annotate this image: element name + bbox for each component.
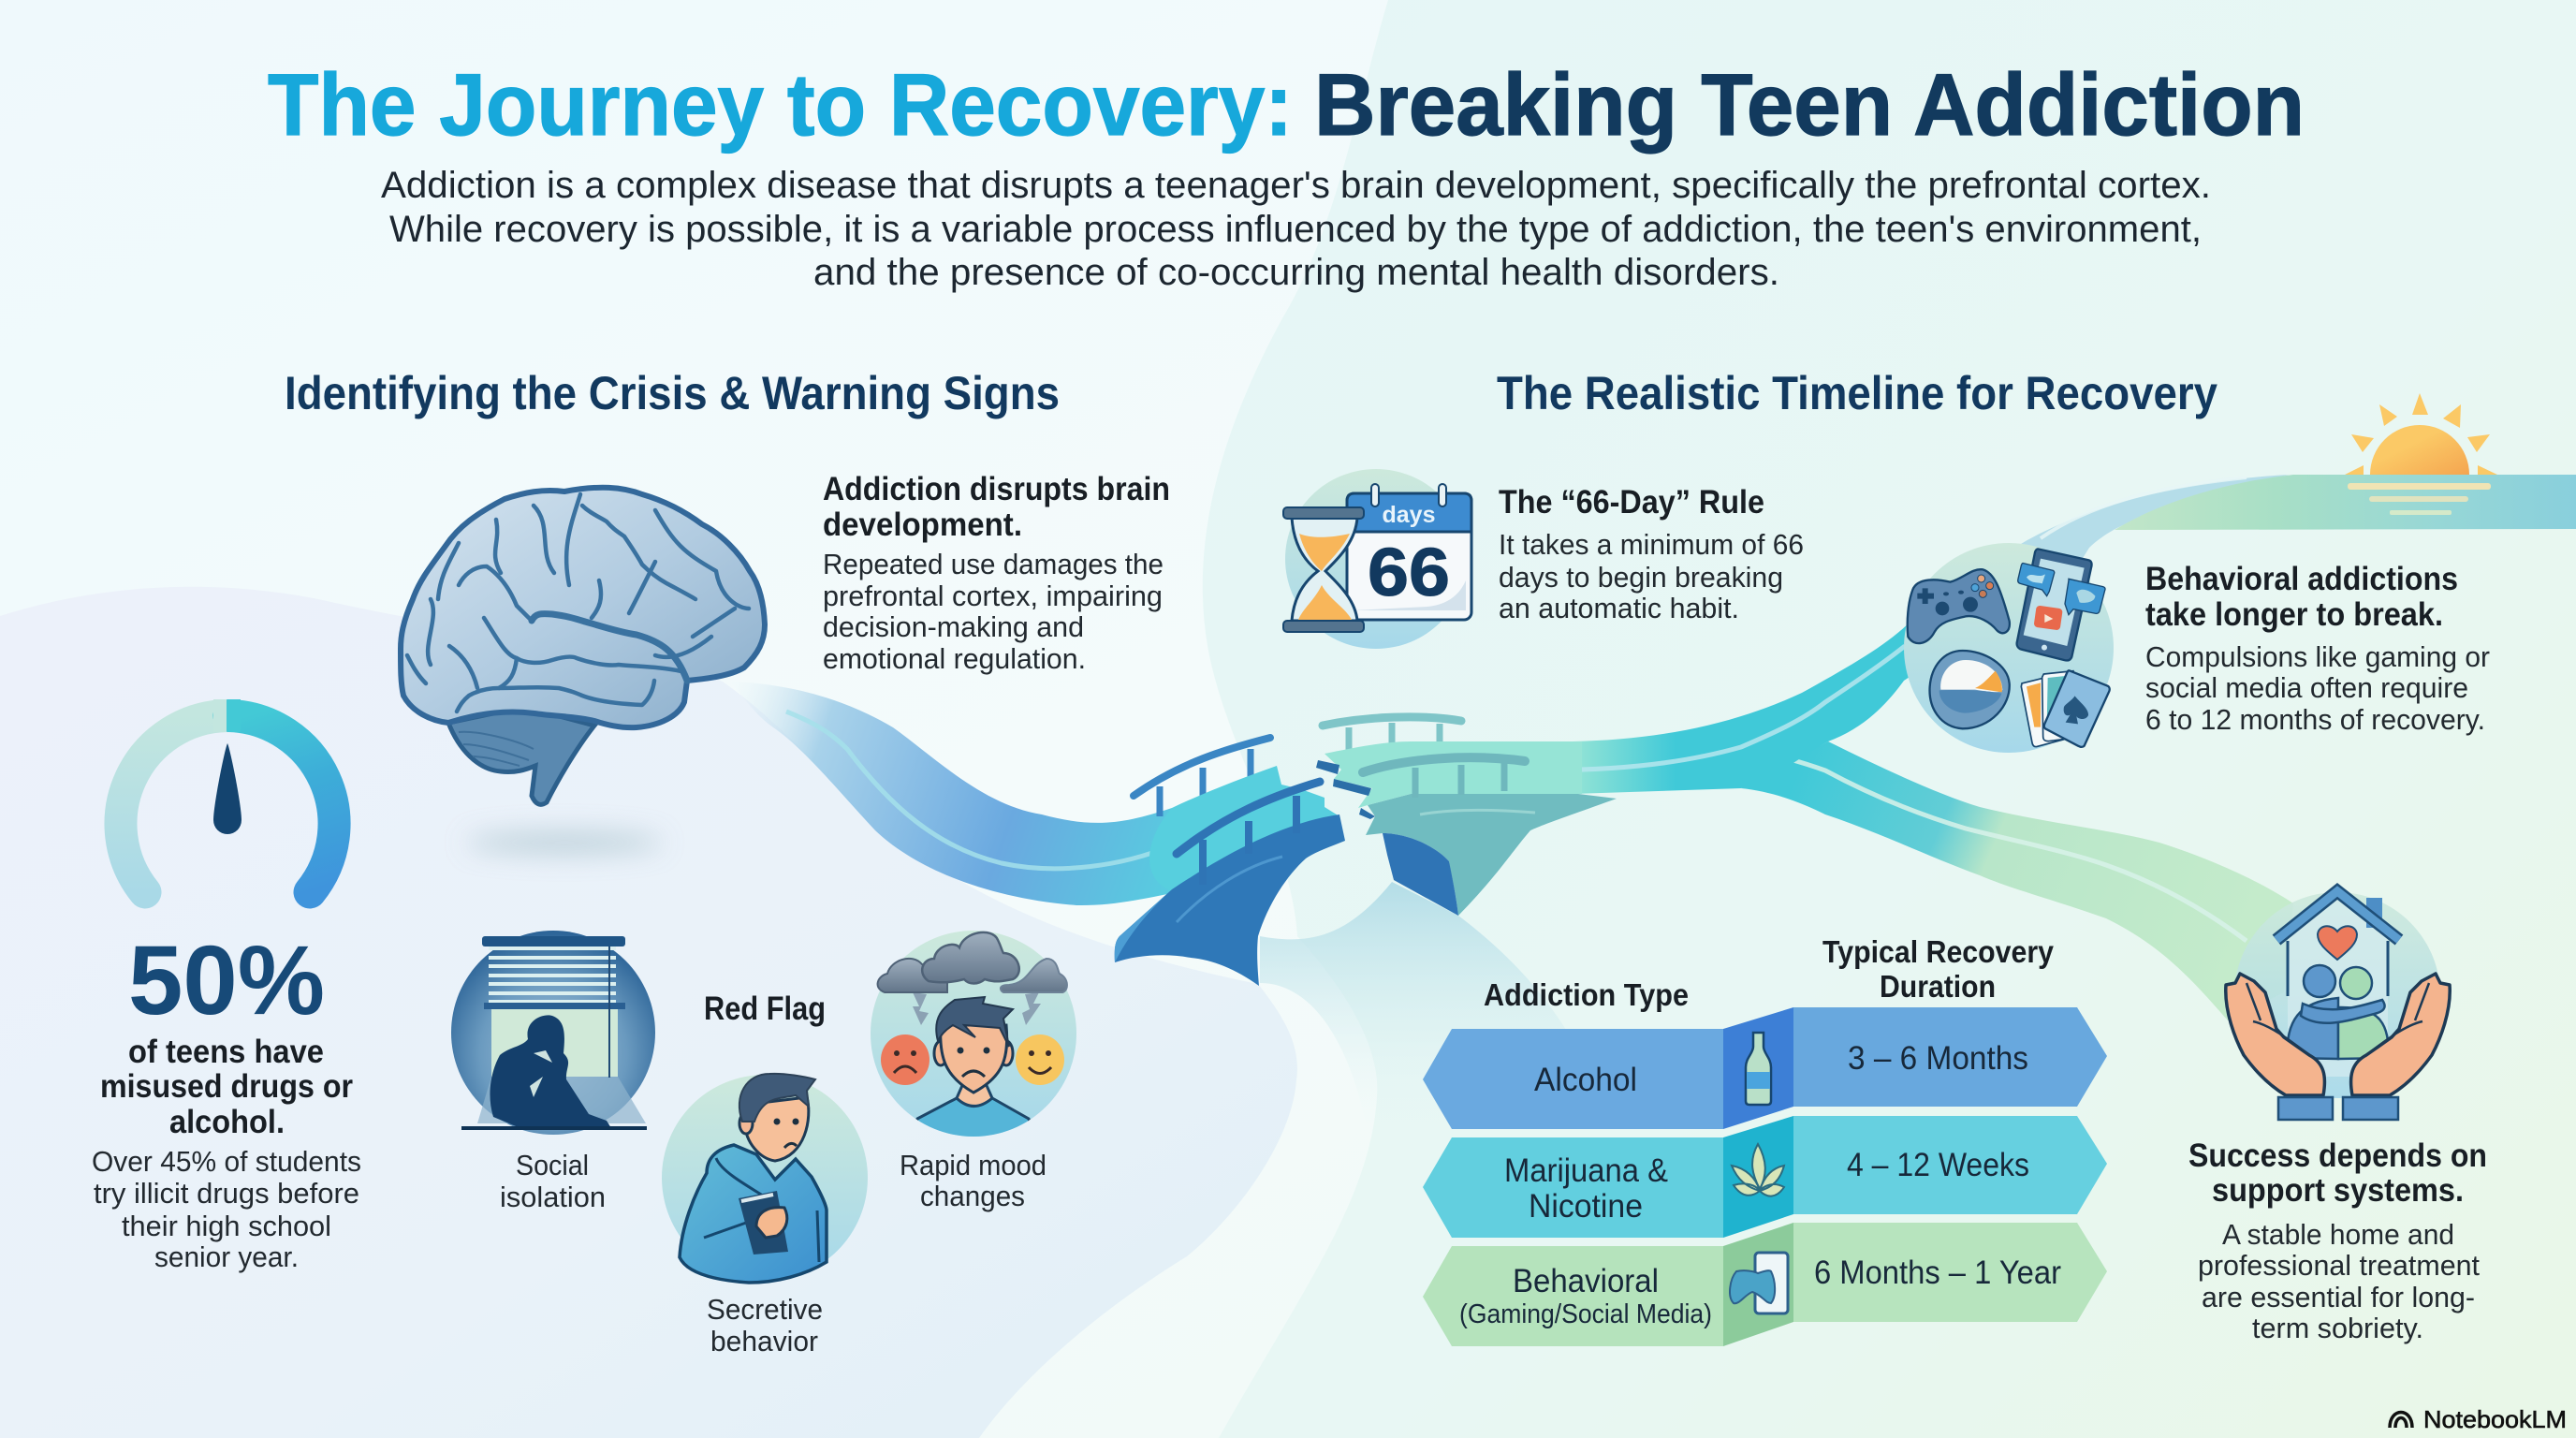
- icon: secretive behavior: [662, 1074, 868, 1283]
- text: 66-day rule: It takes a minimum of 66: [1499, 528, 1804, 561]
- heading: warning signs: Identifying the Crisis & Warning Signs: [285, 367, 1060, 419]
- icon: home held by hands: [2226, 891, 2450, 1120]
- table: recovery durations: [1423, 934, 2107, 1346]
- column header: typical recovery duration: Duration: [1880, 969, 1996, 1004]
- text: behavioral addictions: social media often require: [2145, 671, 2468, 704]
- left hand: [2226, 974, 2324, 1095]
- text: 66-day rule: The “66-Day” Rule: [1499, 484, 1764, 521]
- subtitle text block: and the presence of co-occurring mental health disorders.: [813, 252, 1779, 293]
- row: marijuana and nicotine: 4 – 12 Weeks: [1847, 1147, 2029, 1183]
- stat: 50 percent: of teens have: [128, 1034, 324, 1070]
- stat: 50 percent: Over 45% of students: [92, 1145, 361, 1178]
- icon: behavioral addictions cluster: [1904, 543, 2114, 753]
- text: brain development: Addiction disrupts brain: [823, 471, 1170, 507]
- label: social isolation: Social: [516, 1149, 589, 1181]
- playing cards: [2021, 670, 2110, 747]
- column header: typical recovery duration: [1822, 934, 2055, 1004]
- stat: 50 percent: senior year.: [154, 1240, 299, 1273]
- icon: social isolation: [451, 931, 655, 1135]
- label: secretive behavior: Secretive: [707, 1293, 823, 1326]
- row: behavioral: (Gaming/Social Media): [1459, 1299, 1712, 1329]
- heading: timeline: The Realistic Timeline for Recovery: [1497, 367, 2217, 419]
- calendar number: 66: 66: [1368, 536, 1450, 610]
- stat: 50 percent: misused drugs or: [100, 1068, 353, 1105]
- text: 66-day rule: [1499, 484, 1804, 624]
- river: pale upper branch toward horizon: [1994, 475, 2289, 580]
- label: rapid mood changes: changes: [920, 1180, 1025, 1212]
- text: support systems: term sobriety.: [2252, 1312, 2423, 1344]
- illustration: broken bridge right half: [1316, 717, 1617, 916]
- label: secretive behavior: behavior: [710, 1325, 818, 1357]
- label: secretive behavior: [707, 1293, 823, 1357]
- subtitle text block: Addiction is a complex disease that disrupts a teenager's brain development, specifically the prefrontal cortex.: [381, 165, 2211, 206]
- subtitle text block: While recovery is possible, it is a variable process influenced by the type of addiction, the teen's environment,: [389, 209, 2202, 250]
- subtitle text block: [381, 165, 2211, 293]
- title: Breaking Teen Addiction: [1314, 55, 2305, 154]
- icon: rapid mood changes: [871, 931, 1076, 1152]
- text: brain development: [823, 471, 1170, 675]
- text: brain development: Repeated use damages the: [823, 548, 1164, 580]
- smartphone: [2017, 549, 2105, 661]
- right hand: [2351, 974, 2450, 1095]
- text: behavioral addictions: take longer to break.: [2145, 596, 2443, 633]
- text: support systems: support systems.: [2212, 1172, 2464, 1209]
- text: support systems: [2188, 1137, 2487, 1344]
- stat: 50 percent: try illicit drugs before: [94, 1177, 359, 1210]
- river: left stream from brain to bridge: [730, 682, 1217, 905]
- illustration: broken bridge left half: [1115, 738, 1345, 986]
- gauge dial: [1930, 651, 2010, 728]
- label: social isolation: [500, 1149, 606, 1213]
- text: support systems: are essential for long-: [2202, 1281, 2475, 1313]
- text: behavioral addictions: [2145, 561, 2490, 736]
- row: marijuana and nicotine: Marijuana &: [1504, 1152, 1668, 1189]
- label: rapid mood changes: [900, 1149, 1046, 1212]
- text: brain development: prefrontal cortex, impairing: [823, 580, 1163, 612]
- gamepad: [1908, 569, 2010, 643]
- row: alcohol: [1423, 1007, 2107, 1129]
- river: lower branch to support: [1741, 741, 2293, 1020]
- column header: addiction type: Addiction Type: [1484, 977, 1689, 1012]
- icon: brain: [401, 488, 765, 853]
- text: support systems: A stable home and: [2222, 1218, 2454, 1251]
- watermark: NotebookLM: NotebookLM: [2423, 1405, 2567, 1433]
- stat: 50 percent: their high school: [122, 1210, 331, 1242]
- row: marijuana and nicotine: [1423, 1116, 2107, 1238]
- text: 66-day rule: days to begin breaking: [1499, 561, 1783, 594]
- river: right stream and upper branch: [1516, 599, 1956, 794]
- calendar label: days: days: [1383, 502, 1435, 528]
- label: rapid mood changes: Rapid mood: [900, 1149, 1046, 1181]
- row: alcohol: Alcohol: [1534, 1062, 1637, 1098]
- text: support systems: Success depends on: [2188, 1137, 2487, 1174]
- text: behavioral addictions: Compulsions like gaming or: [2145, 640, 2490, 673]
- stat: 50 percent: [92, 926, 361, 1273]
- text: behavioral addictions: Behavioral addictions: [2145, 561, 2458, 597]
- text: behavioral addictions: 6 to 12 months of recovery.: [2145, 703, 2485, 736]
- column header: typical recovery duration: Typical Recovery: [1822, 934, 2055, 969]
- row: behavioral: [1423, 1223, 2107, 1346]
- text: brain development: development.: [823, 506, 1022, 543]
- row: alcohol: 3 – 6 Months: [1848, 1040, 2028, 1077]
- stat: 50 percent: 50%: [128, 926, 325, 1035]
- label: social isolation: isolation: [500, 1181, 606, 1213]
- row: marijuana and nicotine: Nicotine: [1529, 1188, 1643, 1225]
- gauge: 50 percent: [121, 699, 334, 892]
- text: brain development: decision-making and: [823, 610, 1084, 643]
- text: support systems: professional treatment: [2198, 1249, 2480, 1282]
- title: The Journey to Recovery:: [268, 55, 1293, 154]
- stat: 50 percent: alcohol.: [169, 1104, 285, 1140]
- row: behavioral: 6 Months – 1 Year: [1814, 1255, 2061, 1291]
- icon: 66-day calendar and hourglass: [1283, 469, 1471, 649]
- illustration: sunrise over water: [2115, 393, 2576, 530]
- title: [268, 55, 2305, 154]
- text: 66-day rule: an automatic habit.: [1499, 592, 1739, 624]
- row: behavioral: Behavioral: [1513, 1263, 1659, 1299]
- heading: red flag: Red Flag: [704, 990, 826, 1027]
- text: brain development: emotional regulation.: [823, 642, 1086, 675]
